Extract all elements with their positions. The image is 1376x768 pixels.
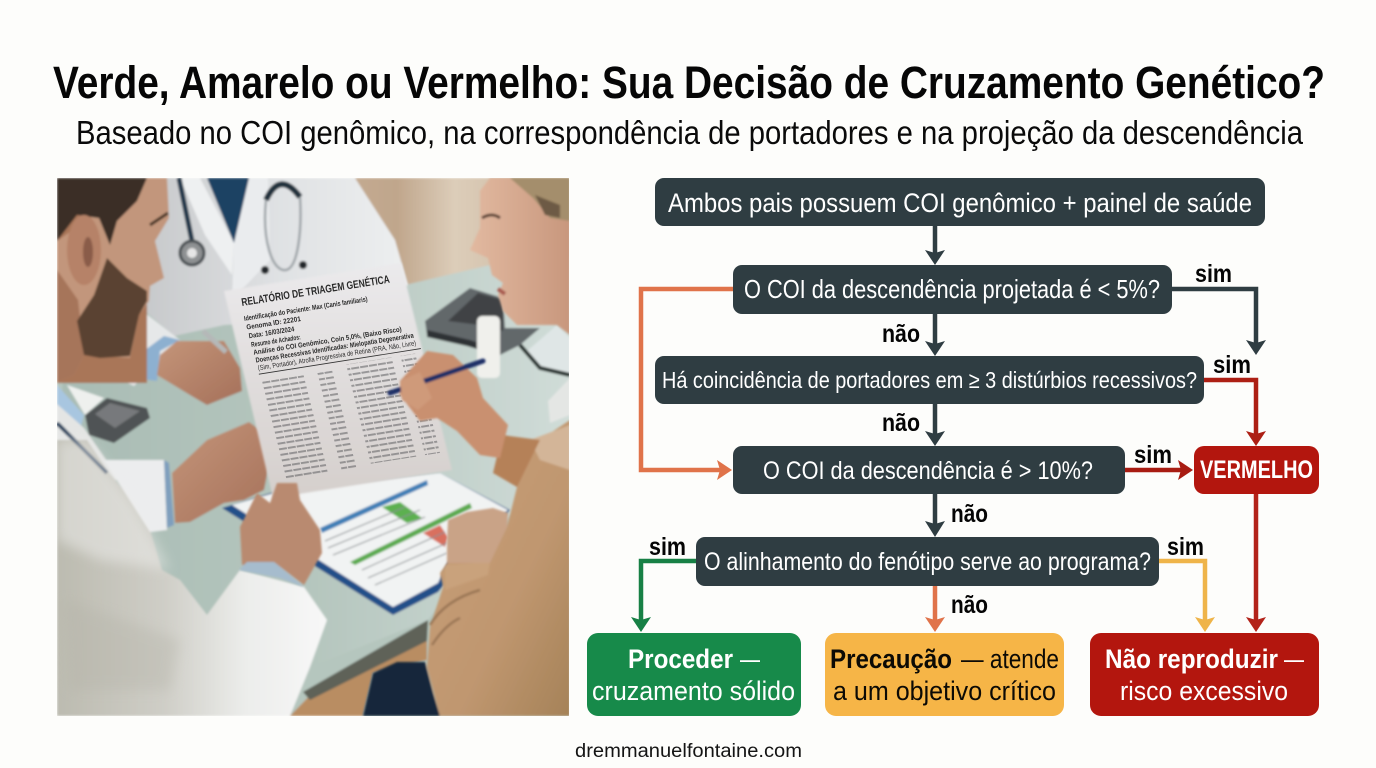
arrow: não to COI above 10 question: [925, 404, 945, 446]
box: projected COI question: [733, 265, 1172, 314]
foreground man's sleeve and coat: [57, 423, 327, 716]
box: start condition: Ambos pais possuem COI genômico + painel de saúde: [668, 188, 1252, 218]
outcome: proceder: cruzamento sólido: [592, 676, 795, 706]
report sheet text: RELATÓRIO DE TRIAGEM GENÉTICA: [240, 273, 391, 309]
branch labels: não: [882, 409, 920, 437]
box: start condition: [655, 178, 1265, 226]
footer website: dremmanuelfontaine.com: [575, 741, 802, 762]
arrow: não to carrier question: [925, 314, 945, 356]
report sheet text: Genoma ID: 22201: [246, 316, 301, 332]
arrow: start to first question: [925, 226, 945, 265]
outcome: precaução: Precaução: [830, 644, 952, 674]
outcome: não reproduzir: risco excessivo: [1120, 676, 1288, 706]
arrow: não to precaução: [925, 586, 945, 632]
foreground man's head: [57, 178, 169, 383]
wrist and cuff: [493, 435, 540, 487]
arrow: sim to proceder: [631, 561, 696, 632]
outcome: precaução: — atende: [961, 644, 1059, 674]
branch labels: não: [882, 320, 920, 348]
box: COI above 10 question: [733, 446, 1125, 494]
branch labels: [649, 260, 1251, 619]
man's right hand: [240, 483, 322, 585]
arrow: sim from carrier question to VERMELHO: [1204, 380, 1266, 446]
flowchart connectors: [631, 226, 1266, 632]
cuff: [239, 562, 304, 587]
pen hand: [400, 351, 508, 458]
report sheet text: Data: 16/03/2024: [248, 326, 295, 340]
report sheet text: (Sim, Portador), Atrofia Progressiva de Retina (PRA, Não, Livre): [257, 340, 417, 372]
woman's face: [470, 178, 570, 335]
report sheet: [224, 263, 452, 498]
outcome: precaução: [825, 633, 1064, 716]
pen: [390, 361, 483, 393]
outcome: proceder: [587, 633, 801, 716]
box: phenotype question: [696, 537, 1159, 586]
box: carrier match question: [655, 356, 1204, 404]
woman's sweater: [427, 420, 570, 716]
outcome: proceder: —: [740, 644, 760, 674]
box: carrier match question: Há coincidência de portadores em ≥ 3 distúrbios recessivos?: [662, 367, 1197, 393]
outcome: precaução: a um objetivo crítico: [833, 676, 1056, 706]
outcome: não reproduzir: [1090, 633, 1319, 716]
branch labels: sim: [1195, 260, 1232, 288]
outcome: não reproduzir: Não reproduzir: [1105, 644, 1278, 674]
report sheet text: Identificação do Paciente: Max (Canis familiaris): [244, 296, 368, 323]
report sheet text: Análise do COI Genômico, Coin 5,0%, (Baixo Risco): [253, 326, 402, 357]
box: projected COI question: O COI da descendência projetada é < 5%?: [744, 274, 1160, 304]
lower hand: [447, 508, 508, 563]
box: VERMELHO: VERMELHO: [1200, 456, 1313, 484]
hands and woman in front of the sheet: [239, 178, 570, 716]
arrow: orange bypass to COI above 10: [641, 289, 733, 480]
report sheet text: [240, 269, 441, 484]
box: VERMELHO: [1194, 446, 1319, 494]
branch labels: sim: [1213, 351, 1251, 379]
arrow: sim from first question: [1172, 289, 1266, 355]
arrow: sim to não reproduzir (amber): [1159, 561, 1215, 632]
outcome: não reproduzir: —: [1284, 644, 1304, 674]
outcome: proceder: Proceder: [628, 644, 733, 674]
box: COI above 10 question: O COI da descendência é > 10%?: [763, 457, 1093, 485]
branch labels: sim: [649, 533, 686, 561]
arrow: sim from COI above 10 to VERMELHO: [1125, 460, 1193, 480]
photo: clinicians and client reviewing a genetic screening report: [57, 178, 570, 716]
arrow: não to phenotype question: [925, 494, 945, 537]
branch labels: sim: [1134, 441, 1172, 469]
branch labels: não: [951, 591, 988, 619]
clipboard and lower report: [222, 473, 510, 615]
branch labels: sim: [1167, 533, 1204, 561]
box: phenotype question: O alinhamento do fenótipo serve ao programa?: [704, 548, 1151, 576]
dark knee: [363, 662, 440, 716]
report sheet text: Resumo de Achados:: [251, 334, 301, 349]
arrow: VERMELHO to não reproduzir: [1246, 494, 1266, 632]
branch labels: não: [951, 500, 988, 528]
report sheet text: Doenças Recessivas Identificadas: Mielopatia Degenerativa: [255, 333, 414, 364]
